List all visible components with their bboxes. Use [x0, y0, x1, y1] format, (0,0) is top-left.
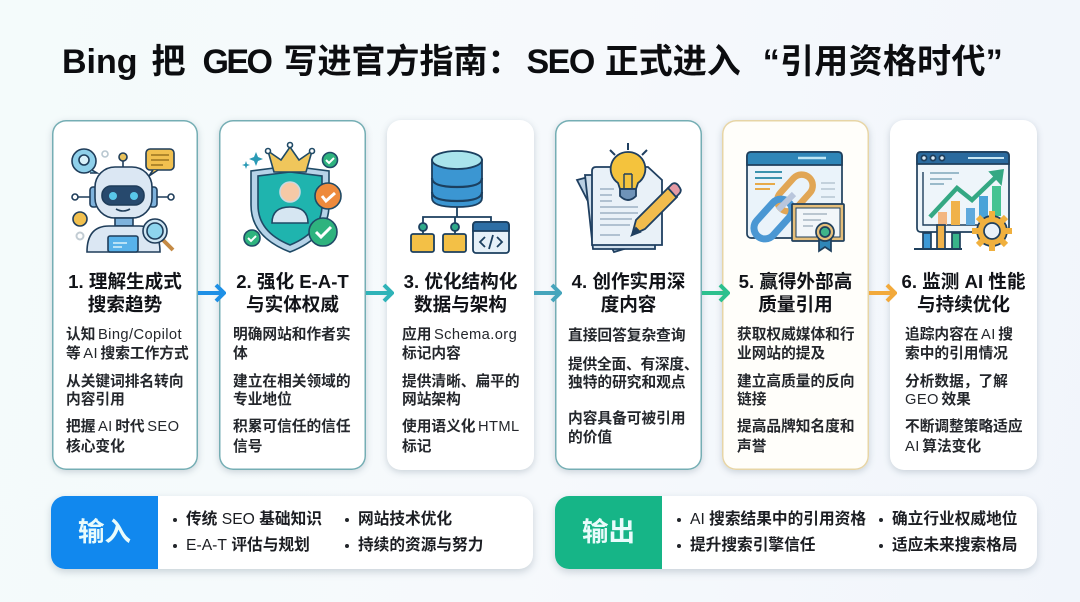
step text: 业网站的提及: [737, 346, 825, 362]
input label: [51, 496, 158, 569]
step text: 提供清晰、扁平的: [402, 374, 520, 390]
step text: 标记内容: [402, 346, 461, 362]
icon: AI robot with magnifier: [71, 148, 175, 253]
input label: 输入: [78, 517, 131, 547]
step text: 直接回答复杂查询: [568, 328, 686, 344]
icon: shield with crown and checks: [242, 142, 342, 253]
panel: step 3: [387, 120, 534, 470]
output list item: 提升搜索引擎信任: [690, 537, 816, 554]
step text: 把握 AI 时代 SEO: [66, 419, 179, 435]
step text: 应用 Schema.org: [402, 327, 517, 343]
step text: 分析数据，了解: [905, 374, 1008, 390]
step text: 内容引用: [66, 392, 125, 408]
step text: 独特的研究和观点: [568, 375, 686, 391]
title: Bing 把 GEO 写进官方指南：SEO 正式进入 “引用资格时代”: [62, 43, 1003, 81]
step heading: 5. 赢得外部高: [739, 271, 852, 292]
input list item: 传统 SEO 基础知识: [186, 511, 322, 528]
output list item: 适应未来搜索格局: [892, 537, 1018, 554]
step heading line 2: 搜索趋势: [88, 294, 162, 315]
step text: 链接: [737, 392, 766, 408]
step text: 提高品牌知名度和: [737, 419, 855, 435]
step text: 认知 Bing/Copilot: [66, 327, 182, 343]
step text: 声誉: [737, 439, 766, 455]
step text: 专业地位: [233, 392, 292, 408]
arrow: step 3 to 4: [534, 284, 562, 302]
arrow: step 1 to 2: [198, 284, 226, 302]
icon: analytics chart and gear: [914, 151, 1012, 251]
input list item: 网站技术优化: [358, 511, 452, 528]
panel: step 2: [219, 120, 366, 470]
step text: 体: [233, 346, 248, 362]
icon: documents, light bulb and pencil: [576, 143, 682, 254]
step text: 建立在相关领域的: [233, 374, 351, 390]
output label: 输出: [582, 517, 635, 547]
step heading: 2. 强化 E-A-T: [236, 271, 349, 292]
step text: 从关键词排名转向: [66, 374, 184, 390]
step text: 信号: [233, 439, 262, 455]
step text: 核心变化: [66, 439, 125, 455]
step text: 等 AI 搜索工作方式: [66, 346, 189, 362]
output label: [555, 496, 662, 569]
step heading: 4. 创作实用深: [572, 271, 685, 292]
step text: 不断调整策略适应: [905, 419, 1023, 435]
arrow: step 4 to 5: [702, 284, 730, 302]
step text: 内容具备可被引用: [568, 411, 686, 427]
step heading line 2: 与持续优化: [917, 294, 1010, 315]
icon: chain link and certificate: [746, 151, 845, 253]
step text: AI 算法变化: [905, 439, 981, 455]
panel: step 5: [722, 120, 869, 470]
step heading line 2: 数据与架构: [414, 294, 507, 315]
icon: database and structure tree: [410, 150, 510, 254]
panel: output: [555, 496, 1037, 569]
step text: 提供全面、有深度、: [568, 357, 698, 373]
input list item: 持续的资源与努力: [358, 537, 484, 554]
input list item: E-A-T 评估与规划: [186, 537, 310, 554]
step heading: 6. 监测 AI 性能: [902, 271, 1025, 292]
step text: GEO 效果: [905, 392, 971, 408]
step text: 标记: [402, 439, 431, 455]
step text: 的价值: [568, 430, 612, 446]
step heading: 3. 优化结构化: [404, 271, 517, 292]
panel: step 6: [890, 120, 1037, 470]
step text: 网站架构: [402, 392, 461, 408]
step heading line 2: 质量引用: [758, 294, 833, 315]
step heading line 2: 度内容: [601, 294, 656, 315]
step heading line 2: 与实体权威: [246, 294, 339, 315]
arrow: step 2 to 3: [366, 284, 394, 302]
panel: input: [51, 496, 533, 569]
arrow: step 5 to 6: [869, 284, 897, 302]
step text: 建立高质量的反向: [737, 374, 855, 390]
step text: 积累可信任的信任: [233, 419, 351, 435]
step text: 获取权威媒体和行: [737, 327, 855, 343]
step text: 使用语义化 HTML: [402, 419, 520, 435]
panel: step 1: [52, 120, 198, 470]
step text: 索中的引用情况: [905, 346, 1008, 362]
output list item: 确立行业权威地位: [892, 511, 1018, 528]
panel: step 4: [555, 120, 702, 470]
step text: 追踪内容在 AI 搜: [905, 327, 1013, 343]
output list item: AI 搜索结果中的引用资格: [690, 511, 866, 528]
step heading: 1. 理解生成式: [68, 271, 182, 292]
step text: 明确网站和作者实: [233, 327, 351, 343]
